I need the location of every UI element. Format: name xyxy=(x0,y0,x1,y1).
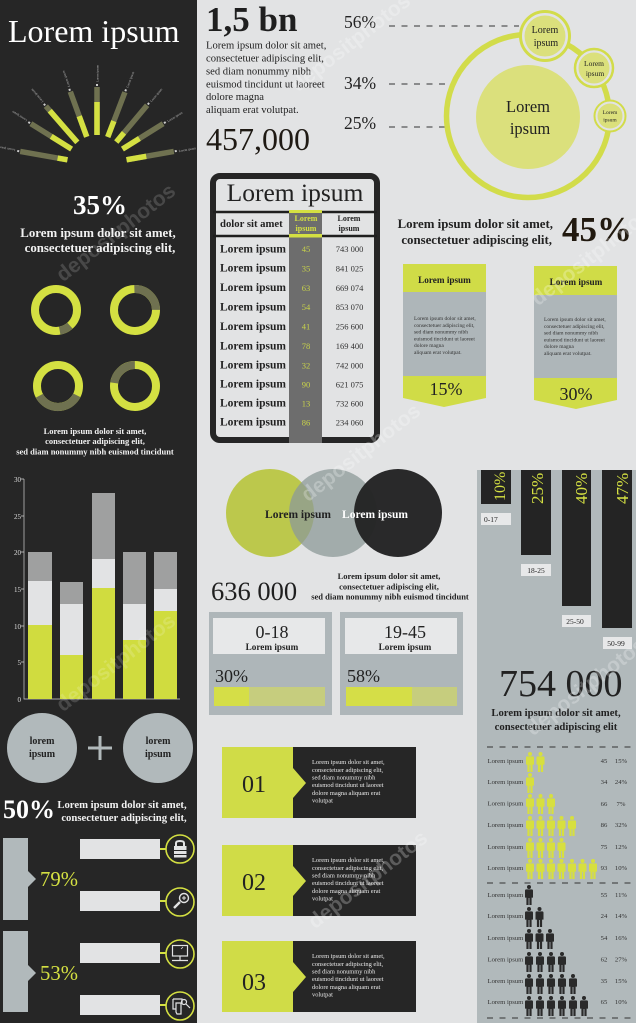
card: 30%: sed diam nonummy nibh xyxy=(544,331,598,337)
table values: 621 075 xyxy=(336,380,363,390)
table highlighted values: 86 xyxy=(302,418,310,428)
row: documents xyxy=(80,992,194,1020)
axis labels: 0 xyxy=(18,696,22,704)
table values: 732 600 xyxy=(336,398,363,408)
table highlighted values xyxy=(302,244,311,428)
row: magnifier xyxy=(80,888,194,916)
step 02: euismod tincidunt ut laoreet xyxy=(312,880,384,887)
chart: radial bars: Lorem ipsum xyxy=(61,70,71,88)
tag: 79% xyxy=(3,838,78,920)
bar 2 xyxy=(60,582,83,699)
bar 0-17: 0-17 xyxy=(484,515,498,524)
chart: venn diagram xyxy=(226,469,442,557)
pictogram: yellow people: 32% xyxy=(615,822,628,829)
card: 15%: Lorem ipsum xyxy=(418,275,471,285)
stat: 636 000: 636 000 xyxy=(211,576,297,606)
card: 15%: consectetuer adipiscing elit, xyxy=(414,323,475,329)
table row labels: Lorem ipsum xyxy=(220,244,286,256)
stat: 56%: 56% xyxy=(344,12,376,32)
bar 18-25: 18-25 xyxy=(527,566,545,575)
row: lock xyxy=(80,835,194,863)
step 03: euismod tincidunt ut laoreet xyxy=(312,976,384,983)
table row labels: Lorem ipsum xyxy=(220,378,286,390)
table values: 841 025 xyxy=(336,264,363,274)
circle: small 1 xyxy=(520,12,570,60)
card: 15%: sed diam nonummy nibh xyxy=(414,330,468,336)
axis labels: 20 xyxy=(14,549,22,557)
bar 0-17 xyxy=(481,470,511,525)
chart: age bars xyxy=(481,470,632,649)
text block: under 35%: consectetuer adipiscing elit, xyxy=(25,241,175,255)
text block: beside 45%: Lorem ipsum dolor sit amet, xyxy=(398,217,553,231)
watermark: depositphotos xyxy=(304,826,432,933)
pictogram: dark people: 62 xyxy=(601,956,607,964)
pictogram: dark people: 14% xyxy=(615,913,628,920)
table highlighted values: 32 xyxy=(302,360,310,370)
card: 15%: euismod tincidunt ut laoreet xyxy=(414,336,475,342)
text block: under donuts: Lorem ipsum dolor sit amet, xyxy=(44,426,146,436)
text block: under donuts: consectetuer adipiscing elit, xyxy=(45,436,145,446)
stat: 754 000: 754 000 xyxy=(499,663,622,705)
step 01: consectetuer adipiscing elit, xyxy=(312,767,384,774)
circle: small 3 xyxy=(594,100,626,132)
table header: ipsum xyxy=(296,224,317,233)
card: age 0-18: 0-18 xyxy=(256,622,288,642)
card: 30%: dolore magna xyxy=(544,344,574,350)
tag: 53%: 53% xyxy=(40,963,78,985)
card: 15%: aliquam erat volutpat. xyxy=(414,350,462,356)
card: age 0-18: Lorem ipsum xyxy=(246,642,299,652)
card: 30%: Lorem ipsum xyxy=(550,277,603,287)
pictogram: yellow people: 7% xyxy=(617,801,626,808)
table row labels: Lorem ipsum xyxy=(220,340,286,352)
axis labels xyxy=(14,476,22,704)
pictogram: dark people: Lorem ipsum xyxy=(488,935,524,942)
text block: beside 50%: Lorem ipsum dolor sit amet, xyxy=(57,799,187,811)
table row labels: Lorem ipsum xyxy=(220,302,286,314)
card: 15%: dolore magna xyxy=(414,343,444,349)
table values: 743 000 xyxy=(336,244,363,254)
panel: right grey column xyxy=(477,470,636,1023)
step 02: volutpat xyxy=(312,896,333,902)
card: 15%: 15% xyxy=(430,379,462,399)
pictogram: yellow people: 10% xyxy=(615,865,628,872)
tag: 79%: 79% xyxy=(40,869,78,891)
text block: under donuts: sed diam nonummy nibh euismod tincidunt xyxy=(16,446,174,456)
pictogram: yellow people: Lorem ipsum xyxy=(488,779,524,786)
bar 1 xyxy=(28,552,52,699)
table row labels: Lorem ipsum xyxy=(220,360,286,372)
bar 25-50 xyxy=(562,470,591,627)
icon: plus xyxy=(88,736,112,760)
text block: beside 45%: consectetuer adipiscing elit, xyxy=(401,233,552,247)
card: 15%: Lorem ipsum dolor sit amet, xyxy=(414,316,476,322)
card: age 0-18: 30% xyxy=(215,666,248,686)
chart: donut 2 xyxy=(114,289,156,331)
circle: lorem ipsum right: ipsum xyxy=(145,749,172,760)
step 02 xyxy=(222,845,416,916)
pictogram: dark people: 16% xyxy=(615,935,628,942)
row: monitor xyxy=(80,940,194,968)
bar 50-99: 50-99 xyxy=(607,639,625,648)
stat: 1,5 bn: 1,5 bn xyxy=(206,0,297,39)
step 03: sed diam nonummy nibh xyxy=(312,968,376,976)
bar 50-99 xyxy=(602,470,632,649)
icon: magnifier xyxy=(174,894,188,908)
chart: radial bars: Lorem ipsum xyxy=(125,71,135,88)
circle: small 1: ipsum xyxy=(534,38,558,49)
card: 30%: 30% xyxy=(560,384,592,404)
table highlighted values: 78 xyxy=(302,341,310,351)
table highlighted values: 41 xyxy=(302,322,310,332)
card: 30% xyxy=(534,266,617,409)
step 01: Lorem ipsum dolor sit amet, xyxy=(312,759,385,766)
table highlighted column xyxy=(289,210,322,443)
pictogram: yellow people: Lorem ipsum xyxy=(488,758,524,765)
text block: intro: euismod tincidunt ut laoreet xyxy=(206,80,325,90)
card: 30%: consectetuer adipiscing elit, xyxy=(544,324,605,330)
text block: under 754 000: Lorem ipsum dolor sit amet, xyxy=(491,707,621,719)
chart: radial bars: Lorem ipsum xyxy=(149,87,164,103)
axis labels: 10 xyxy=(14,623,22,631)
table row labels: Lorem ipsum xyxy=(220,416,286,428)
step 02: consectetuer adipiscing elit, xyxy=(312,865,384,872)
pictogram: yellow people: 15% xyxy=(615,758,628,765)
step 03: 03 xyxy=(242,970,266,996)
stat: 45%: 45% xyxy=(562,210,632,249)
text block: intro: Lorem ipsum dolor sit amet, xyxy=(206,40,326,52)
step 01: 01 xyxy=(242,772,266,798)
bar 18-25: 25% xyxy=(528,473,547,504)
card: age 19-45: 19-45 xyxy=(384,622,426,642)
step 01: euismod tincidunt ut laoreet xyxy=(312,782,384,789)
step 01: dolore magna aliquam erat xyxy=(312,790,381,797)
text block: beside 50%: consectetuer adipiscing elit, xyxy=(61,812,187,824)
pictogram: yellow people: 93 xyxy=(601,865,608,872)
title: Lorem ipsum xyxy=(8,13,180,49)
step 01 xyxy=(222,747,416,818)
pictogram: dark people: 35 xyxy=(601,978,608,985)
pictogram: dark people: 15% xyxy=(615,978,628,985)
step 03: consectetuer adipiscing elit, xyxy=(312,961,384,968)
pictogram: dark people: Lorem ipsum xyxy=(488,956,524,964)
table highlighted values: 54 xyxy=(302,302,311,312)
pictogram: yellow people: Lorem ipsum xyxy=(488,822,524,829)
table highlighted values: 45 xyxy=(302,244,310,254)
panel: left dark column xyxy=(0,0,197,1023)
chart: stacked bars xyxy=(14,476,180,704)
pictogram: yellow people: Lorem ipsum xyxy=(488,865,524,872)
table header xyxy=(220,214,361,233)
bar 4 xyxy=(123,552,146,699)
table row labels: Lorem ipsum xyxy=(220,282,286,294)
table highlighted values: 35 xyxy=(302,264,310,274)
table header: ipsum xyxy=(339,224,360,233)
chart: venn diagram: Lorem ipsum xyxy=(342,509,408,521)
pictogram: dark people: 65 xyxy=(601,999,608,1006)
stat: 50%: 50% xyxy=(3,795,55,824)
axis labels: 30 xyxy=(14,476,22,484)
pictogram: dark people: Lorem ipsum xyxy=(488,913,524,920)
table values: 853 070 xyxy=(336,302,363,312)
pictogram: dark people: 27% xyxy=(615,956,628,964)
step 03: Lorem ipsum dolor sit amet, xyxy=(312,953,385,960)
circle: lorem ipsum right: lorem xyxy=(146,736,171,747)
bar 25-50: 40% xyxy=(572,473,591,504)
chart: radial bars: Lorem ipsum xyxy=(30,87,44,103)
table values: 669 074 xyxy=(336,283,364,293)
table row labels: Lorem ipsum xyxy=(220,398,286,410)
chart: circle cluster xyxy=(446,12,626,198)
text block: intro: dolore magna xyxy=(206,92,264,103)
circle: small 3: ipsum xyxy=(603,118,617,124)
circle: small 2: ipsum xyxy=(586,69,604,78)
bar 25-50: 25-50 xyxy=(566,617,584,626)
pictogram: yellow people: 12% xyxy=(615,844,628,851)
step 02: Lorem ipsum dolor sit amet, xyxy=(312,857,385,864)
chart: donut 1 xyxy=(26,280,86,340)
pictogram: yellow people: 45 xyxy=(601,758,608,765)
axis labels: 5 xyxy=(18,659,22,667)
table header: dolor sit amet xyxy=(220,218,283,230)
card: 30%: euismod tincidunt ut laoreet xyxy=(544,337,605,343)
text block: beside 636 000: Lorem ipsum dolor sit amet, xyxy=(338,571,440,581)
table values: 742 000 xyxy=(336,360,363,370)
card: age 19-45: Lorem ipsum xyxy=(379,642,432,652)
pictogram: dark people: 11% xyxy=(615,892,627,899)
pictogram: dark people xyxy=(488,885,628,1016)
table header: Lorem xyxy=(295,214,318,223)
pictogram: dark people: Lorem ipsum xyxy=(488,999,524,1006)
card: age 19-45 xyxy=(340,612,463,715)
watermark: depositphotos xyxy=(52,179,180,286)
table values xyxy=(336,244,364,428)
table xyxy=(213,176,377,443)
table row labels: Lorem ipsum xyxy=(220,321,286,333)
step 01: sed diam nonummy nibh xyxy=(312,774,376,782)
axis labels: 15 xyxy=(14,586,22,594)
card: 30%: Lorem ipsum dolor sit amet, xyxy=(544,317,606,323)
pictogram: yellow people: Lorem ipsum xyxy=(488,800,524,808)
table values: 234 060 xyxy=(336,418,363,428)
table row labels: Lorem ipsum xyxy=(220,262,286,274)
watermark: depositphotos xyxy=(297,399,425,506)
text block: beside 636 000: sed diam nonummy nibh euismod tincidunt xyxy=(311,592,469,602)
pictogram: yellow people: 75 xyxy=(601,844,608,851)
step 01: volutpat xyxy=(312,798,333,804)
circle: main: ipsum xyxy=(510,119,550,138)
watermark: depositphotos xyxy=(52,609,180,716)
step 03: volutpat xyxy=(312,992,333,998)
card: 30%: aliquam erat volutpat. xyxy=(544,351,592,357)
chart: venn diagram: Lorem ipsum xyxy=(265,509,331,521)
table highlighted values: 13 xyxy=(302,398,310,408)
pictogram: yellow people: 34 xyxy=(601,779,608,786)
pictogram: yellow people xyxy=(488,752,628,879)
table row labels xyxy=(220,244,286,428)
circle: small 2 xyxy=(575,49,613,87)
text block: intro: sed diam nonummy nibh xyxy=(206,66,312,78)
bar 3 xyxy=(92,493,115,699)
circle: lorem ipsum left: ipsum xyxy=(29,749,56,760)
chart: radial bars: Lorem ipsum xyxy=(96,64,100,82)
circle: small 3: Lorem xyxy=(603,110,618,116)
step 02: sed diam nonummy nibh xyxy=(312,872,376,880)
table highlighted values: 90 xyxy=(302,380,310,390)
pictogram: dark people: 10% xyxy=(615,999,628,1006)
stat: 34%: 34% xyxy=(344,73,376,93)
table values: 256 600 xyxy=(336,322,363,332)
text block: beside 636 000: consectetuer adipiscing elit, xyxy=(339,582,439,592)
table title: Lorem ipsum xyxy=(227,178,364,207)
step 03: dolore magna aliquam erat xyxy=(312,984,381,991)
table highlighted values: 63 xyxy=(302,283,310,293)
circle: small 2: Lorem xyxy=(584,59,604,68)
icon: lock xyxy=(174,840,186,858)
step 02: 02 xyxy=(242,870,266,896)
tag: 53% xyxy=(3,931,78,1012)
card: age 0-18 xyxy=(209,612,332,715)
pictogram: yellow people: 24% xyxy=(615,779,628,786)
pictogram: yellow people: 86 xyxy=(601,822,608,829)
circle: small 1: Lorem xyxy=(532,25,559,36)
pictogram: dark people: 55 xyxy=(601,892,608,899)
chart: radial bars: Lorem ipsum xyxy=(11,110,28,122)
bar 0-17: 10% xyxy=(492,472,509,501)
text block: intro: consectetuer adipiscing elit, xyxy=(206,54,324,64)
stat: 25%: 25% xyxy=(344,113,376,133)
pictogram: dark people: Lorem ipsum xyxy=(488,978,524,985)
bar 18-25 xyxy=(521,470,551,576)
stat: 35%: 35% xyxy=(73,190,127,220)
chart: radial bars xyxy=(0,64,197,162)
chart: donut 4 xyxy=(111,362,159,410)
pictogram: dark people: Lorem ipsum xyxy=(488,892,524,899)
chart: donut 3 xyxy=(30,358,86,414)
circle: lorem ipsum left xyxy=(7,713,77,783)
circle: main xyxy=(476,65,580,169)
bar 50-99: 47% xyxy=(613,473,632,504)
stat: 457,000: 457,000 xyxy=(206,121,310,157)
circle: main: Lorem xyxy=(506,97,550,116)
icon: monitor xyxy=(172,946,188,960)
pictogram: dark people: 54 xyxy=(601,935,608,942)
text block: under 35%: Lorem ipsum dolor sit amet, xyxy=(20,226,176,240)
circle: lorem ipsum left: lorem xyxy=(30,736,55,747)
table header: Lorem xyxy=(338,214,361,223)
table values: 169 400 xyxy=(336,341,363,351)
bar 5 xyxy=(154,552,177,699)
circle: lorem ipsum right xyxy=(123,713,193,783)
step 02: dolore magna aliquam erat xyxy=(312,888,381,895)
icon: documents xyxy=(173,999,190,1014)
step 03 xyxy=(222,941,416,1012)
chart: radial bars: Lorem ipsum xyxy=(178,146,197,153)
card: 15% xyxy=(403,264,486,407)
pictogram: dark people: 24 xyxy=(601,913,608,920)
pictogram: yellow people: Lorem ipsum xyxy=(488,844,524,851)
text block: intro: aliquam erat volutpat. xyxy=(206,105,299,116)
axis labels: 25 xyxy=(14,513,22,521)
text block: under 754 000: consectetuer adipiscing elit xyxy=(495,721,618,733)
pictogram: yellow people: 66 xyxy=(601,801,608,808)
card: age 19-45: 58% xyxy=(347,666,380,686)
chart: radial bars: Lorem ipsum xyxy=(167,110,184,123)
